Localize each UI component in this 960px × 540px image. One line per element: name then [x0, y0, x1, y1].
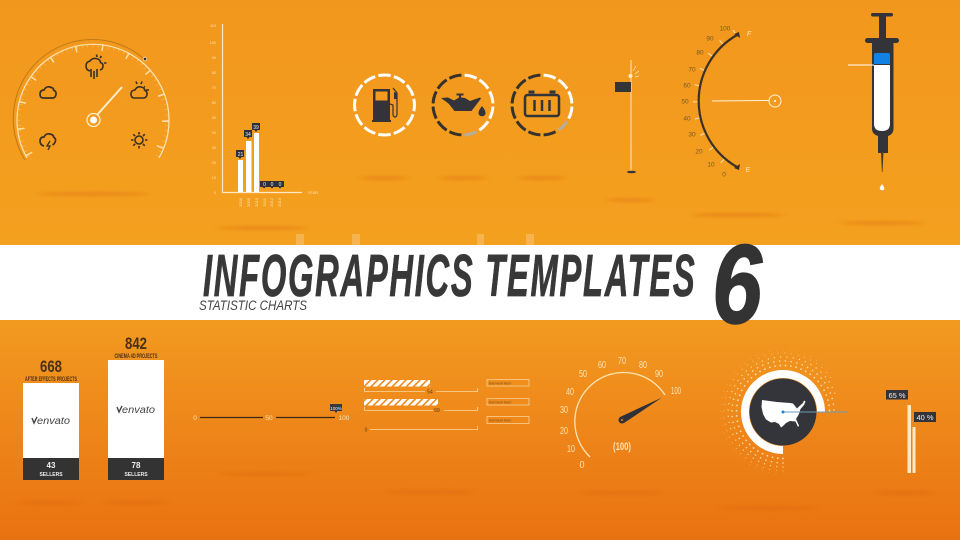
speedometer: 80: [639, 360, 647, 371]
gauge numbers: 0: [722, 172, 726, 178]
bar chart: [210, 24, 318, 207]
axis labels: 0: [214, 191, 216, 195]
gauge numbers: 80: [696, 50, 704, 56]
drop: [880, 184, 884, 190]
gauge numbers: 10: [707, 162, 715, 168]
card: after effects projects: envato: [37, 416, 70, 427]
speedometer: 10: [567, 444, 575, 455]
slider tooltip: [330, 404, 342, 413]
card: after effects projects: [23, 357, 79, 480]
background: lower orange panel: [0, 319, 960, 540]
axis labels: 10: [212, 176, 216, 180]
weather gauge: [13, 40, 169, 160]
card: after effects projects: SELLERS: [39, 472, 63, 478]
year labels: 2008: [238, 197, 243, 207]
axis labels: 20: [212, 161, 216, 165]
axis labels: [210, 24, 318, 195]
speedometer: 60: [598, 360, 606, 371]
card: after effects projects: 43: [47, 461, 56, 470]
axis labels: 110: [210, 24, 216, 28]
axis labels: 30: [212, 146, 216, 150]
icon: cloud: [40, 87, 56, 98]
striped progress bars: 59: [434, 408, 440, 414]
gauge numbers: 40: [683, 116, 691, 122]
icon ring: fuel: [355, 75, 414, 135]
bars: [238, 133, 259, 192]
icon: sun: [131, 132, 148, 148]
gauge needle: [87, 87, 122, 126]
icon: partly sunny: [131, 82, 149, 98]
striped progress bars: [364, 380, 529, 434]
speedometer: 40: [566, 387, 574, 398]
slider chart: 100%: [330, 406, 342, 411]
card: after effects projects: AFTER EFFECTS PROJECTS: [25, 377, 77, 383]
pointer line: [783, 411, 848, 413]
card: cinema 4d projects: [108, 334, 164, 480]
year labels: 2011: [262, 197, 267, 207]
gauge numbers: [681, 26, 731, 178]
axis labels: YEAR: [308, 191, 318, 195]
syringe blue fluid: [874, 53, 890, 64]
axis labels: 70: [212, 86, 216, 90]
speedometer: [560, 356, 681, 471]
slider chart: 100: [339, 415, 350, 422]
gauge numbers: 20: [695, 148, 703, 156]
slider chart: 50: [265, 415, 273, 422]
year labels: 2010: [254, 197, 259, 207]
speedometer: 100: [671, 386, 681, 397]
dot halo: [721, 350, 836, 474]
speedometer needle: [618, 398, 662, 424]
background: upper orange panel: [0, 0, 960, 246]
bar chart: 34: [245, 132, 251, 138]
syringe: [848, 13, 899, 190]
gauge numbers: 90: [706, 36, 714, 42]
bar chart: 39: [253, 125, 259, 131]
syringe white fluid: [874, 65, 890, 131]
card: cinema 4d projects: envato: [122, 405, 155, 416]
map: USA: [762, 400, 806, 428]
flag marker: [615, 60, 639, 173]
bar chart: 0: [279, 182, 282, 188]
year labels: 2013: [277, 197, 282, 207]
year labels: 2009: [246, 197, 251, 207]
striped progress bars: 0: [365, 428, 368, 434]
icon ring: oil: [432, 74, 494, 136]
striped progress bars: Element Item: [489, 418, 511, 422]
gauge numbers: 50: [681, 98, 689, 106]
icon: battery: [525, 91, 559, 116]
icon: storm cloud: [40, 134, 56, 150]
gauge numbers: 30: [688, 132, 696, 138]
percentage bars: 65 %: [888, 391, 906, 400]
year labels: [238, 197, 282, 207]
title band: [0, 222, 960, 347]
subtitle: STATISTIC CHARTS: [199, 298, 307, 313]
card: cinema 4d projects: 78: [132, 461, 141, 470]
speedometer: (100): [613, 441, 631, 453]
gauge numbers: 100: [720, 26, 731, 32]
gauge numbers: 60: [683, 82, 691, 90]
bar chart: 0: [263, 182, 266, 188]
speedometer: 0: [580, 460, 585, 471]
icon: oil can: [441, 94, 486, 116]
USA map dial: [721, 350, 848, 474]
axis labels: 60: [212, 101, 216, 105]
axis labels: 90: [212, 56, 216, 60]
speedometer: 90: [655, 369, 663, 380]
axis labels: 80: [212, 71, 216, 75]
axis labels: 50: [212, 116, 216, 120]
striped progress bars: Element Item: [489, 382, 511, 386]
slider chart: 0: [193, 415, 197, 422]
bar value tags: [236, 123, 284, 188]
semicircle fuel gauge: F: [747, 31, 752, 38]
speedometer: 20: [560, 426, 568, 437]
card: cinema 4d projects: CINEMA 4D PROJECTS: [114, 354, 158, 360]
year labels: 2012: [269, 197, 274, 207]
axis labels: 100: [210, 41, 216, 45]
icon: rain cloud: [86, 54, 106, 79]
axis labels: 40: [212, 131, 216, 135]
speedometer: 70: [618, 356, 626, 367]
icon: fuel pump: [372, 88, 397, 122]
striped progress bars: Element Item: [489, 400, 511, 404]
slider chart: [193, 404, 350, 422]
faint ghost blocks: [296, 234, 534, 245]
axes: [222, 24, 302, 192]
percentage bars: 40 %: [916, 413, 934, 422]
bar chart: 21: [238, 152, 243, 158]
semicircle fuel gauge: E: [746, 167, 751, 174]
percentage bars: [886, 390, 936, 473]
card: cinema 4d projects: 842: [125, 334, 147, 353]
speedometer: 30: [560, 405, 568, 416]
title: INFOGRAPHICS TEMPLATES: [203, 244, 695, 310]
semicircle fuel gauge: [681, 26, 781, 178]
legend boxes: [487, 380, 529, 424]
gauge numbers: 70: [688, 66, 696, 74]
dark disc: [750, 378, 816, 446]
card: cinema 4d projects: SELLERS: [124, 472, 148, 478]
icon ring: battery: [511, 74, 573, 136]
white ring: [745, 374, 821, 450]
gauge ticks: [695, 32, 735, 170]
speedometer: 50: [579, 369, 587, 380]
big number 6: 6: [712, 222, 763, 347]
bar chart: 0: [271, 182, 274, 188]
card: after effects projects: 668: [40, 357, 62, 376]
gauge needle: [712, 95, 781, 107]
striped progress bars: 54: [427, 390, 433, 396]
gauge arc: [699, 35, 737, 167]
floor shadows: [20, 176, 935, 510]
